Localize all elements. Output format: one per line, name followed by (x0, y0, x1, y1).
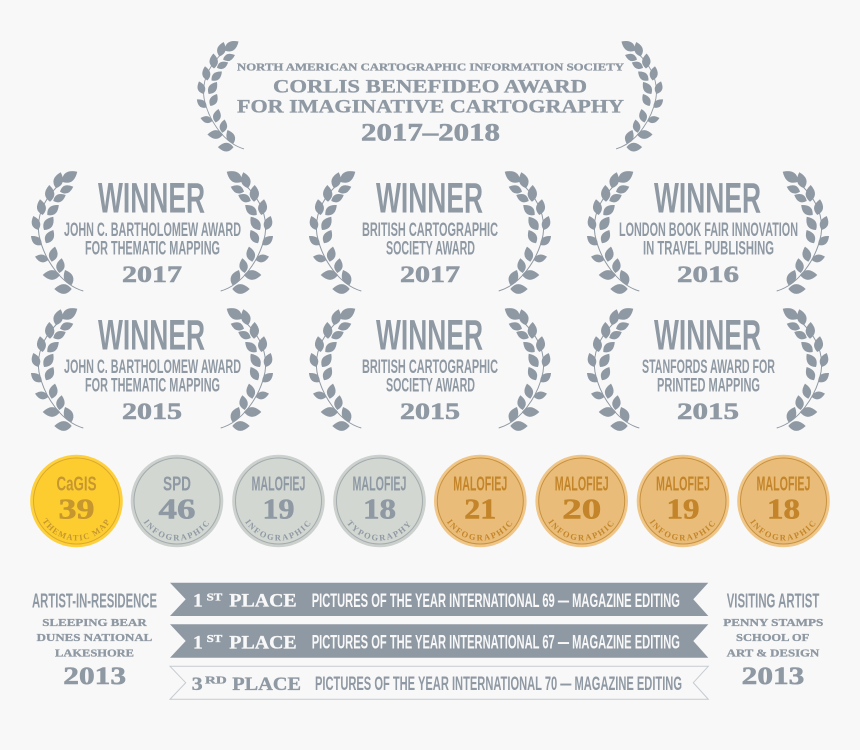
ribbon: first place POY 69: 1 (193, 592, 203, 612)
ribbon: first place POY 69: ST (207, 592, 223, 604)
heading: winner: WINNER (98, 175, 205, 223)
badge: SPD 46: INFOGRAPHIC (144, 519, 209, 540)
panel: winner Stanfords 2015 (584, 304, 832, 431)
text: award line two: SOCIETY AWARD (386, 375, 475, 396)
panel: winner Bartholomew 2017 (28, 167, 276, 294)
text block: artist-in-residence: 2013 (63, 663, 126, 690)
badge: Malofiej 19: MALOFIEJ (656, 474, 710, 496)
heading: winner: WINNER (654, 312, 761, 360)
badge: Malofiej 19 infographic: 19 (262, 493, 294, 525)
ribbon: first place POY 67: ST (207, 634, 223, 645)
text block: artist-in-residence: DUNES NATIONAL (37, 632, 152, 644)
text block: artist-in-residence: LAKESHORE (55, 648, 134, 660)
panel: winner British Cartographic 2015 (306, 304, 554, 431)
ribbon: third place POY 70: RD (205, 676, 227, 687)
icon: laurel (28, 304, 276, 431)
badge: Malofiej 18: MALOFIEJ (756, 474, 810, 496)
icon: laurel (306, 304, 554, 431)
badge: Malofiej 18 typography: 18 (363, 493, 396, 525)
ribbon: third place POY 70: 3 (192, 675, 203, 695)
badge: Malofiej 19 infographic: INFOGRAPHIC (245, 519, 310, 540)
badge: Malofiej 19: 19 (666, 493, 700, 525)
badge: Malofiej 19 infographic (232, 454, 325, 548)
badge: SPD 46: SPD (163, 474, 191, 496)
text: award line one: BRITISH CARTOGRAPHIC (362, 357, 498, 378)
text block: visiting artist: PENNY STAMPS (723, 617, 823, 629)
badge: CaGIS 39: THEMATIC MAP (43, 518, 109, 540)
badge: Malofiej 18: INFOGRAPHIC (750, 519, 816, 540)
badge: Malofiej 19: INFOGRAPHIC (650, 519, 715, 540)
ribbon: first place POY 67 (170, 624, 708, 658)
badge: Malofiej 18 typography: TYPOGRAPHY (348, 520, 410, 541)
text: award line one: BRITISH CARTOGRAPHIC (362, 220, 498, 241)
text: award line two: PRINTED MAPPING (657, 375, 760, 396)
text block: artist-in-residence: ARTIST-IN-RESIDENCE (32, 591, 157, 613)
ribbon: first place POY 67: PLACE (229, 633, 297, 653)
heading: winner: WINNER (376, 312, 483, 360)
badge: Malofiej 18 typography: MALOFIEJ (352, 474, 406, 496)
badge: Malofiej 19 (636, 454, 730, 548)
badge: Malofiej 18 (737, 454, 830, 548)
badge: Malofiej 21: 21 (464, 493, 496, 525)
badge: Malofiej 21 (434, 454, 527, 548)
text block: visiting artist (723, 591, 823, 690)
text block: artist-in-residence (32, 591, 157, 690)
panel: NACIS top award (195, 38, 665, 151)
text block: visiting artist: SCHOOL OF (736, 632, 810, 644)
text: award line two: SOCIETY AWARD (386, 238, 475, 259)
badge: Malofiej 19 infographic: MALOFIEJ (252, 474, 306, 496)
icon: laurel (28, 167, 276, 294)
panel: winner British Cartographic 2017 (306, 167, 554, 294)
text block: visiting artist: ART & DESIGN (727, 648, 819, 660)
text: year: 2016 (677, 262, 739, 287)
panel: winner Bartholomew 2015 (28, 304, 276, 431)
ribbon: third place POY 70 (170, 666, 708, 699)
badge: Malofiej 20: INFOGRAPHIC (548, 519, 614, 540)
ribbon: first place POY 69: PLACE (229, 592, 297, 612)
badge: Malofiej 21: INFOGRAPHIC (446, 519, 512, 540)
badge: Malofiej 21: MALOFIEJ (453, 474, 507, 496)
text: award line one: JOHN C. BARTHOLOMEW AWARD (64, 220, 241, 241)
text: year: 2015 (122, 399, 182, 424)
ribbon: first place POY 69 (170, 583, 708, 616)
text: year: 2017 (122, 262, 182, 287)
icon: top laurel right (616, 38, 665, 151)
text: year: 2017 (400, 262, 460, 287)
text block: artist-in-residence: SLEEPING BEAR (42, 617, 148, 629)
icon: laurel (584, 304, 832, 431)
text: award line two: FOR THEMATIC MAPPING (85, 375, 220, 396)
ribbon: first place POY 67: 1 (193, 633, 203, 653)
heading: award name: CORLIS BENEFIDEO AWARD (273, 77, 587, 98)
text: society name: NORTH AMERICAN CARTOGRAPHIC INFORMATION SOCIETY (237, 62, 624, 74)
text: year: 2015 (400, 399, 460, 424)
badge: SPD 46 (130, 454, 224, 548)
ribbon: third place POY 70: PLACE (232, 675, 301, 695)
badge: Malofiej 20: MALOFIEJ (555, 474, 609, 496)
badge: Malofiej 18: 18 (767, 493, 800, 525)
heading: winner: WINNER (98, 312, 205, 360)
badge: CaGIS 39: 39 (58, 493, 94, 525)
badge: Malofiej 20: 20 (562, 493, 601, 525)
text: award line two: IN TRAVEL PUBLISHING (643, 238, 774, 259)
badge: CaGIS 39 (30, 454, 123, 548)
text: award line two: FOR THEMATIC MAPPING (85, 238, 220, 259)
badge: Malofiej 18 typography (333, 454, 426, 548)
text: award line one: JOHN C. BARTHOLOMEW AWARD (64, 357, 241, 378)
icon: laurel (584, 167, 832, 294)
text: years: 2017–2018 (361, 120, 500, 147)
text: year: 2015 (677, 399, 739, 424)
badge: SPD 46: 46 (158, 493, 196, 525)
text block: visiting artist: 2013 (742, 663, 804, 690)
panel: winner London Book Fair 2016 (584, 167, 832, 294)
heading: winner: WINNER (654, 175, 761, 223)
heading: award name line two: FOR IMAGINATIVE CARTOGRAPHY (237, 96, 624, 117)
icon: top laurel left (195, 38, 244, 151)
badge: Malofiej 20 (535, 454, 628, 548)
badge: CaGIS 39: CaGIS (56, 474, 96, 496)
icon: laurel (306, 167, 554, 294)
heading: winner: WINNER (376, 175, 483, 223)
